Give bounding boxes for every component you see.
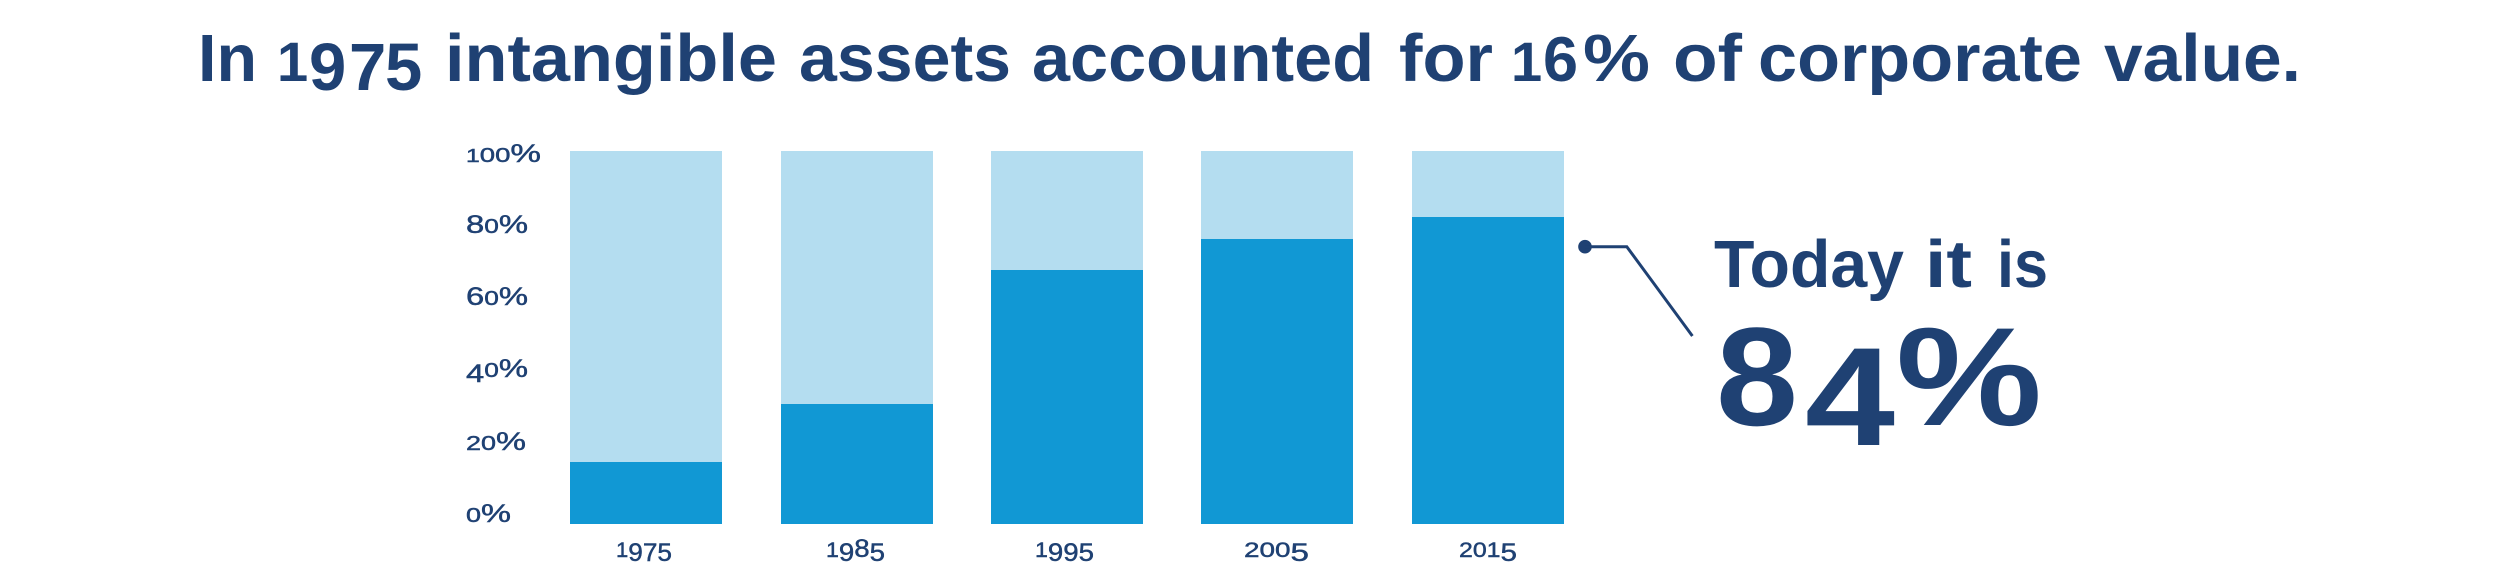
y axis labels: 80% [466,211,528,239]
y axis labels: 0 [484,360,499,382]
x axis labels: 5 [870,539,885,567]
x axis labels: 5 [1291,539,1309,567]
y axis labels [466,140,541,528]
x axis labels: 975 [628,539,672,567]
callout leader line [1578,240,1692,336]
callout value: 84%: % [1896,298,2042,455]
x axis labels: 1 [826,539,839,562]
title: 7 [349,30,386,105]
title: % [1583,21,1650,96]
y axis labels: % [499,355,528,383]
callout text: today it is: is [1997,227,2048,302]
y axis labels: 0% [466,500,511,528]
x axis labels: 995 [1048,539,1094,567]
y axis labels: 60% [466,283,528,311]
y axis labels: 20 % [466,428,526,456]
x axis labels [616,535,1517,567]
bar 2015 [1412,151,1564,524]
title: 5 [385,30,422,105]
callout text: today it is: Today [1714,227,1904,302]
bar 2005 [1201,151,1353,524]
bar 1995 [991,151,1143,524]
x axis labels: 1 [616,539,628,562]
bar 1985 [781,151,933,524]
y axis labels: 4 [466,360,484,388]
title: 1 [1511,30,1542,93]
x axis labels: 9 [839,539,854,567]
x axis labels: 8 [854,535,870,563]
title: assets [799,21,1011,96]
title: for [1399,21,1493,96]
callout text: today it is: it [1925,227,1972,302]
x axis labels: 201 [1459,539,1494,562]
title [198,21,2301,105]
x axis labels: 1 [1035,539,1048,562]
callout value: 84%: 8 [1716,298,1798,455]
title: In [198,21,257,96]
title: corporate [1758,21,2082,96]
x axis labels: 200 [1244,539,1279,562]
title: of [1673,21,1743,96]
y axis labels: 100 % [466,140,541,168]
callout value: 84%: 4 [1805,318,1895,475]
title: value. [2104,21,2301,96]
title: 6 [1543,25,1578,95]
title: accounted [1032,21,1374,96]
callout value: 84% [1716,298,2042,475]
title: intangible [445,21,777,96]
callout text: today it is [1714,227,2048,302]
title: 1 [277,30,308,93]
bar 1975 [570,151,722,524]
title: 9 [309,30,346,105]
x axis labels: 5 [1501,539,1517,567]
